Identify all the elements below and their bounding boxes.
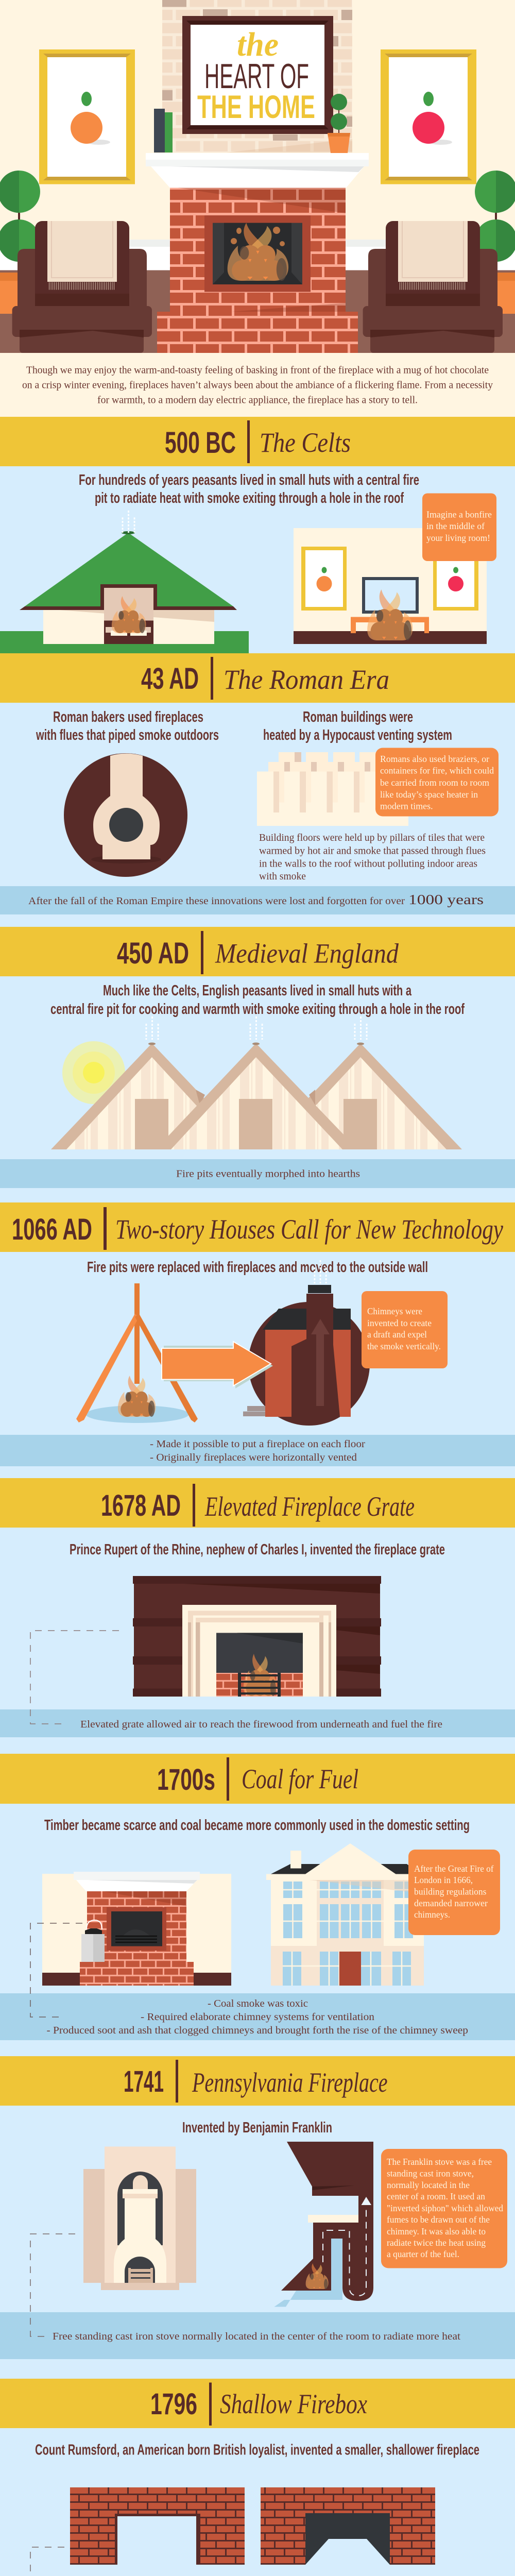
title frame: HEART OF <box>204 57 309 96</box>
topiary right <box>475 171 515 314</box>
roman oven <box>64 753 187 877</box>
banner: Elevated Fireplace Grate <box>204 1491 415 1522</box>
arrow <box>162 1342 273 1388</box>
dashed connector <box>30 2547 64 2576</box>
banner <box>0 927 515 976</box>
hypocaust diagram <box>257 752 408 826</box>
description <box>79 472 419 506</box>
hypocaust note <box>259 832 486 882</box>
brick wall: deep firebox <box>70 2487 245 2565</box>
callout: braziers: Romans also used braziers, or <box>380 754 489 764</box>
upper chimney bricks <box>162 0 352 152</box>
callout: great fire: London in 1666, <box>414 1875 473 1885</box>
callout: bonfire: Imagine a bonfire <box>426 509 492 519</box>
footnote band: Elevated grate allowed air to reach the firewood from underneath and fuel the fire <box>80 1719 442 1730</box>
embers <box>231 227 285 246</box>
section: 1678 AD <box>0 1478 515 1737</box>
callout: franklin stove: The Franklin stove was a free <box>387 2157 492 2167</box>
banner: 450 AD <box>117 937 189 970</box>
brick fireplace <box>157 188 358 353</box>
brick wall: shallow firebox <box>261 2487 435 2565</box>
callout: franklin stove: standing cast iron stove, <box>387 2168 474 2178</box>
banner <box>0 1478 515 1528</box>
title frame: THE HOME <box>197 89 315 125</box>
callout: bonfire <box>422 494 496 561</box>
banner: 43 AD <box>141 662 199 696</box>
hypocaust note: Building floors were held up by pillars of tiles that were <box>259 832 485 843</box>
footnote band <box>0 1993 515 2040</box>
callout: braziers: be carried from room to room <box>380 777 489 788</box>
small potted topiary <box>328 94 350 153</box>
callout: great fire: chimneys. <box>414 1909 450 1920</box>
footnote band: - Originally fireplaces were horizontally vented <box>150 1452 357 1463</box>
intro text <box>22 365 493 406</box>
banner: Medieval England <box>215 938 399 969</box>
banner: 500 BC <box>165 426 236 460</box>
franklin stove cross-section <box>274 2142 373 2307</box>
description <box>50 982 465 1018</box>
wood-panel fireplace with grate <box>133 1576 381 1697</box>
section: 1741 <box>0 2056 515 2359</box>
banner <box>0 2056 515 2106</box>
description: Invented by Benjamin Franklin <box>182 2120 332 2136</box>
dashed connector <box>30 1631 119 1724</box>
callout: franklin stove: fumes to be drawn out of the <box>387 2214 490 2225</box>
footnote band: - Coal smoke was toxic <box>208 1998 308 2009</box>
title frame: the <box>237 26 279 63</box>
footnote band: Fire pits eventually morphed into hearths <box>176 1168 360 1180</box>
hypocaust note: warmed by hot air and smoke that passed through flues <box>259 845 486 856</box>
callout: chimneys: invented to create <box>367 1318 432 1328</box>
footnote band: - Made it possible to put a fireplace on each floor <box>150 1438 365 1450</box>
section: 43 AD <box>0 653 515 914</box>
medieval huts <box>51 1016 462 1149</box>
banner: The Roman Era <box>224 664 389 695</box>
dashed connector <box>30 1923 82 2017</box>
banner: 1741 <box>124 2065 164 2098</box>
footnote band: Free standing cast iron stove normally located in the center of the room to radiate more heat <box>53 2331 460 2342</box>
hero: living room fireplace <box>0 0 515 353</box>
section: 500 BC <box>0 417 515 653</box>
footnote band <box>0 2312 515 2359</box>
callout: bonfire: your living room! <box>426 533 490 543</box>
right armchair <box>363 221 503 353</box>
right description <box>263 709 452 743</box>
callout: franklin stove: normally located in the <box>387 2180 470 2190</box>
callout: braziers: modern times. <box>380 801 433 811</box>
callout: great fire <box>408 1850 500 1935</box>
left description: with flues that piped smoke outdoors <box>36 727 219 743</box>
banner <box>0 1202 515 1252</box>
banner: Pennsylvania Fireplace <box>192 2067 387 2098</box>
fire <box>228 223 288 281</box>
intro text: Though we may enjoy the warm-and-toasty feeling of basking in front of the fireplace with a mug of hot chocolate <box>26 365 489 376</box>
mantel <box>146 153 369 188</box>
banner: Coal for Fuel <box>242 1764 358 1794</box>
footnote band <box>0 1709 515 1737</box>
section: 1700s <box>0 1754 515 2040</box>
callout: braziers: containers for fire, which could <box>380 766 494 776</box>
sun <box>62 1041 125 1104</box>
banner: 1066 AD <box>12 1213 92 1246</box>
coal scuttle <box>81 1920 105 1962</box>
callout: great fire: After the Great Fire of <box>414 1863 493 1874</box>
banner <box>0 653 515 703</box>
callout: chimneys: a draft and expel <box>367 1329 427 1340</box>
footnote band <box>0 886 515 914</box>
footnote band: - Produced soot and ash that clogged chimneys and brought forth the rise of the chimney sweep <box>46 2025 468 2036</box>
banner: 1700s <box>157 1763 215 1797</box>
hypocaust note: in the walls to the roof without polluting indoor areas <box>259 858 477 870</box>
left description: Roman bakers used fireplaces <box>53 709 203 725</box>
franklin stove front <box>83 2146 196 2290</box>
banner <box>0 417 515 466</box>
left picture: orange <box>39 49 135 184</box>
banner <box>0 1754 515 1804</box>
hypocaust note: with smoke <box>259 871 306 882</box>
section: 450 AD <box>0 927 515 1188</box>
callout: bonfire: in the middle of <box>426 521 485 531</box>
hut illustration <box>0 511 249 653</box>
callout: franklin stove: chimney. It was also able to <box>387 2226 486 2236</box>
right picture: apple <box>381 49 476 184</box>
title frame <box>182 16 333 134</box>
banner: The Celts <box>260 427 351 458</box>
intro text: for warmth, to a modern day electric appliance, the fireplace has a story to tell. <box>97 395 418 406</box>
townhouse <box>266 1843 424 1986</box>
callout: great fire: building regulations <box>414 1887 486 1897</box>
modern room illustration <box>294 528 487 644</box>
callout: chimneys: Chimneys were <box>367 1306 422 1316</box>
callout: franklin stove: center of a room. It used an <box>387 2191 485 2201</box>
footnote band <box>0 1435 515 1466</box>
tripod fire <box>76 1283 198 1423</box>
footnote band <box>0 1159 515 1188</box>
right description: Roman buildings were <box>303 709 413 725</box>
callout: franklin stove: radiate twice the heat using <box>387 2238 486 2248</box>
banner <box>0 2379 515 2428</box>
callout: franklin stove: a quarter of the fuel. <box>387 2249 459 2259</box>
footnote band: - Required elaborate chimney systems for ventilation <box>141 2011 374 2023</box>
left description <box>36 709 219 743</box>
callout: chimneys: the smoke vertically. <box>367 1341 441 1351</box>
footnote band: After the fall of the Roman Empire these innovations were lost and forgotten for over <box>28 895 405 907</box>
banner: 1678 AD <box>101 1489 181 1522</box>
callout: franklin stove: "inverted siphon" which allowed <box>387 2203 503 2213</box>
intro text: on a crisp winter evening, fireplaces haven’t always been about the ambiance of a flickering flame. From a necessity <box>22 379 493 391</box>
callout: great fire: demanded narrower <box>414 1898 488 1908</box>
left armchair <box>12 221 152 353</box>
section: 1796 <box>0 2379 515 2576</box>
topiary left <box>0 171 40 314</box>
fireplace cross-section <box>243 1260 370 1426</box>
section: 1066 AD <box>0 1202 515 1466</box>
books <box>154 109 173 152</box>
banner: 1796 <box>150 2387 197 2421</box>
callout: chimneys <box>362 1291 448 1368</box>
callout: braziers: like today’s space heater in <box>380 789 478 800</box>
callout: franklin stove <box>381 2149 507 2268</box>
dashed connector <box>30 2234 75 2336</box>
footnote band: 1000 years <box>408 892 484 907</box>
coal fireplace room <box>42 1872 231 1986</box>
callout: braziers <box>375 748 499 816</box>
banner: Shallow Firebox <box>220 2388 367 2419</box>
